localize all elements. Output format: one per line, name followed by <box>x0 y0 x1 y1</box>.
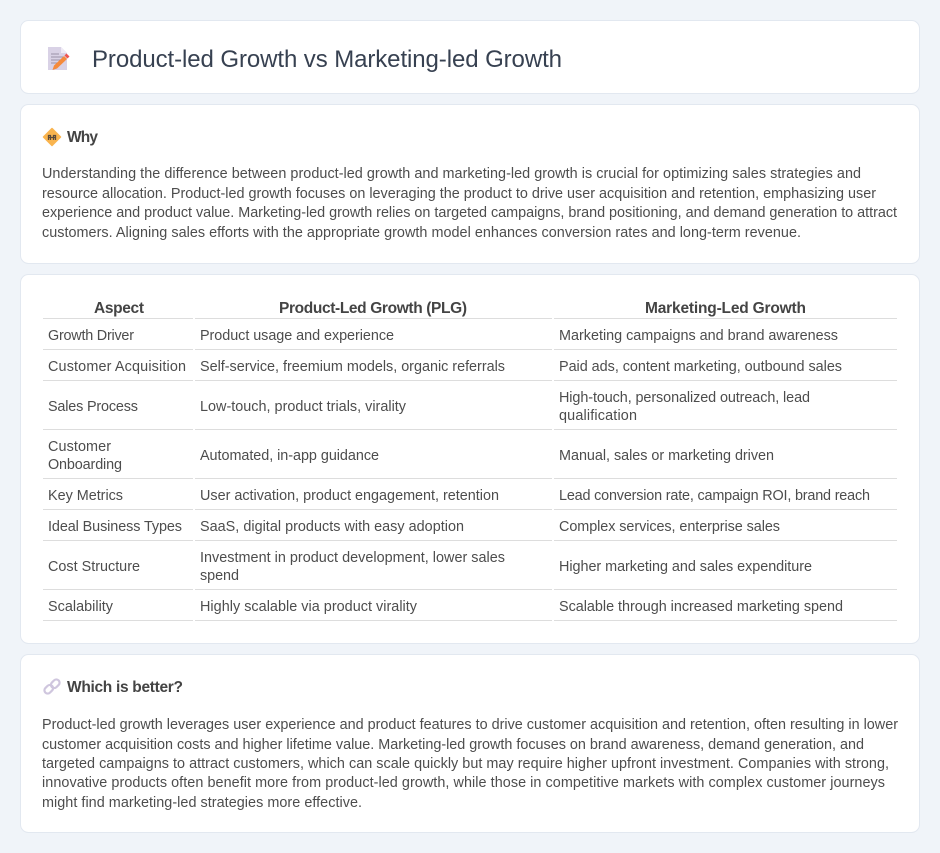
row: ideal business types: Ideal Business Types <box>48 519 182 535</box>
text block: verdict: targeted campaigns to attract customers, which can scale quickly but may require higher upfront investment. Companies with strong, <box>42 756 889 772</box>
panel: comparison table <box>20 274 920 644</box>
text block: verdict: innovative products often benefit more from product-led growth, while those in competitive markets with complex customer journeys <box>42 775 885 791</box>
row: key metrics: Key Metrics <box>48 488 123 504</box>
row: scalability: Scalability <box>48 599 114 615</box>
row: sales process: Low-touch, product trials, virality <box>200 399 407 415</box>
row: customer onboarding: Onboarding <box>48 457 122 473</box>
text block: verdict: customer acquisition costs and higher lifetime value. Marketing-led growth focuses on brand awareness, demand generation, and <box>42 737 864 753</box>
text block: why explanation: resource allocation. Product-led growth focuses on leveraging the product to drive user acquisition and retention, emphasizing user <box>42 186 876 202</box>
row: growth driver: Growth Driver <box>48 328 134 344</box>
row: sales process: qualification <box>559 408 637 424</box>
row: scalability: Highly scalable via product virality <box>200 599 418 615</box>
text block: why explanation: customers. Aligning sales efforts with the appropriate growth model enhances conversion rates and long-term revenue. <box>42 225 801 241</box>
row: customer acquisition <box>48 359 842 375</box>
row: customer onboarding: Automated, in-app guidance <box>200 448 379 464</box>
text block: why explanation: experience and product value. Marketing-led growth relies on targeted campaigns, brand positioning, and demand generation to attract <box>42 205 897 221</box>
row: ideal business types: SaaS, digital products with easy adoption <box>200 519 464 535</box>
table header row <box>94 300 806 317</box>
row: customer onboarding: Manual, sales or marketing driven <box>559 448 774 464</box>
row: sales process: Sales Process <box>48 399 138 415</box>
row: customer acquisition: Customer Acquisition <box>48 359 186 375</box>
icon: link <box>43 678 61 695</box>
title: Product-led Growth vs Marketing-led Growth <box>92 46 562 73</box>
row: sales process: High-touch, personalized outreach, lead <box>559 390 810 406</box>
panel: header <box>20 20 920 94</box>
row: ideal business types: Complex services, enterprise sales <box>559 519 780 535</box>
row: scalability <box>48 599 843 615</box>
table header row: Marketing-Led Growth <box>645 300 806 317</box>
panel: which is better <box>20 654 920 832</box>
row: customer onboarding: Customer <box>48 439 111 455</box>
row: ideal business types <box>48 519 780 535</box>
row: key metrics <box>48 488 870 504</box>
panel: why <box>20 104 920 264</box>
text block: verdict: might find marketing-led strategies more effective. <box>42 795 362 811</box>
row: cost structure <box>48 550 812 584</box>
row: key metrics: Lead conversion rate, campaign ROI, brand reach <box>559 488 870 504</box>
text block: why explanation: Understanding the difference between product-led growth and marketing-led growth is crucial for optimizing sales strategies and <box>42 166 861 182</box>
heading: which is better: Which is better? <box>67 679 183 696</box>
row: cost structure: Higher marketing and sales expenditure <box>559 559 812 575</box>
row: cost structure: Cost Structure <box>48 559 140 575</box>
row: scalability: Scalable through increased marketing spend <box>559 599 843 615</box>
heading: why: Why <box>67 129 98 146</box>
icon: warning diamond <box>44 128 60 146</box>
row: key metrics: User activation, product engagement, retention <box>200 488 499 504</box>
text block: verdict <box>42 717 898 811</box>
row: growth driver: Product usage and experience <box>200 328 394 344</box>
row: customer acquisition: Self-service, freemium models, organic referrals <box>200 359 505 375</box>
table header row: Aspect <box>94 300 144 317</box>
row: cost structure: spend <box>200 568 239 584</box>
text block: verdict: Product-led growth leverages user experience and product features to drive customer acquisition and retention, often resulting in lower <box>42 717 898 733</box>
text block: why explanation <box>42 166 897 241</box>
row: growth driver <box>48 328 838 344</box>
row: cost structure: Investment in product development, lower sales <box>200 550 505 566</box>
row: customer onboarding <box>48 439 774 473</box>
row: customer acquisition: Paid ads, content marketing, outbound sales <box>559 359 842 375</box>
icon: memo with pencil <box>48 47 70 70</box>
row: sales process <box>48 390 810 424</box>
row: growth driver: Marketing campaigns and brand awareness <box>559 328 838 344</box>
table header row: Product-Led Growth (PLG) <box>279 300 467 317</box>
